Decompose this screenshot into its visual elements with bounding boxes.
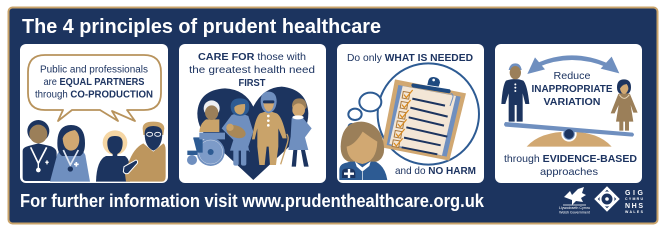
logo: Welsh Government <box>559 187 590 214</box>
panel: care for <box>179 44 326 183</box>
bubble text: through CO-PRODUCTION <box>35 90 153 100</box>
panel: equal partners <box>20 44 168 183</box>
panel: what is needed <box>337 44 484 183</box>
person: patient with light hair <box>96 130 130 182</box>
thought bubble <box>348 63 479 165</box>
care text: the greatest health need <box>189 64 315 76</box>
logo: Welsh Government: Llywodraeth Cymru <box>559 206 590 210</box>
person: nurse <box>50 125 90 182</box>
care text <box>189 51 315 89</box>
care text: FIRST <box>238 77 266 89</box>
person: man on seesaw <box>501 63 529 122</box>
logo: Welsh Government: Welsh Government <box>559 210 590 214</box>
reduce text: approaches <box>540 166 598 178</box>
person: wheelchair user <box>187 100 225 166</box>
person: woman in blue dress <box>288 98 312 167</box>
people: four partners <box>23 120 166 182</box>
logo: NHS Wales: CYMRU <box>625 197 643 201</box>
person: woman on seesaw <box>611 79 638 131</box>
heart <box>197 87 308 180</box>
footer text: For further information visit www.prudenthealthcare.org.uk <box>20 191 485 211</box>
speech bubble <box>28 55 161 121</box>
panel: reduce variation <box>495 44 642 183</box>
bubble text <box>35 64 153 100</box>
person: parent with baby <box>222 98 253 166</box>
bubble text: Public and professionals <box>40 64 148 76</box>
reduce text: through EVIDENCE-BASED <box>504 153 637 165</box>
logo: NHS Wales: WALES <box>625 210 644 214</box>
needed text: Do only WHAT IS NEEDED <box>347 52 473 64</box>
checklist <box>392 91 410 148</box>
logo: NHS Wales: GIG <box>625 190 644 197</box>
seesaw <box>504 122 634 147</box>
title: The 4 principles of prudent healthcare <box>22 16 381 38</box>
person: thinking nurse <box>339 122 387 180</box>
reduce text <box>504 70 637 178</box>
person: doctor <box>23 120 57 181</box>
double arrow <box>527 55 619 74</box>
clipboard <box>382 77 466 161</box>
bubble text: are EQUAL PARTNERS <box>44 77 145 88</box>
no harm text: and do NO HARM <box>395 165 476 177</box>
logo: NHS Wales: NHS <box>625 203 643 210</box>
person: man with cane <box>252 92 288 165</box>
person: older man with glasses <box>123 122 166 182</box>
care text: CARE FOR those with <box>198 51 306 63</box>
reduce text: INAPPROPRIATE <box>532 83 612 95</box>
reduce text: Reduce <box>554 70 591 82</box>
logo: NHS Wales <box>596 188 644 214</box>
reduce text: VARIATION <box>544 96 600 108</box>
